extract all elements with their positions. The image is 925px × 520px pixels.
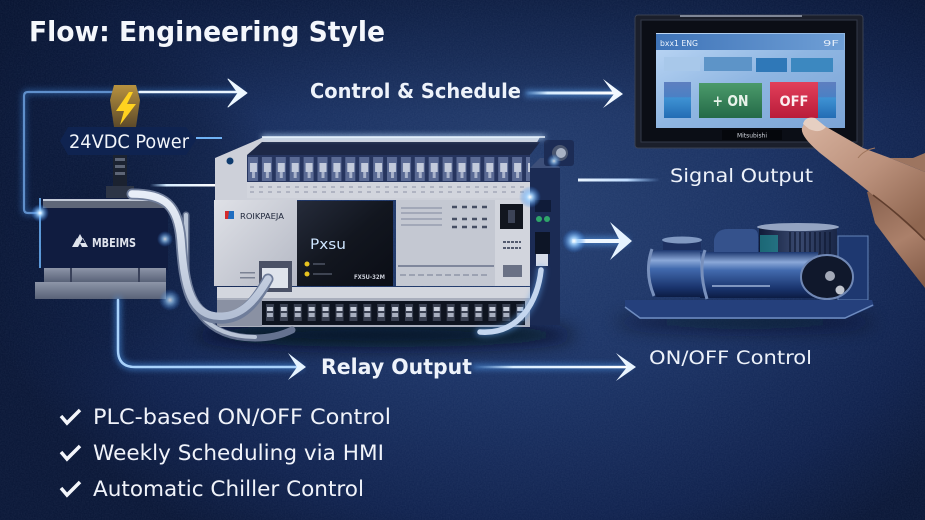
- text: control and schedule: Control & Schedule: [310, 79, 521, 103]
- chiller tube: [648, 249, 818, 299]
- text: on/off control: ON/OFF Control: [649, 347, 812, 369]
- chiller back box: [838, 236, 868, 300]
- cables from power supply to PLC: [132, 194, 292, 338]
- PLC display panel: [297, 201, 393, 286]
- HMI tile right: [818, 82, 836, 118]
- signal output line: [578, 178, 660, 182]
- PLC communication connector: [259, 261, 292, 292]
- PLC display panel: FX5U-32M: [354, 274, 385, 281]
- hand touching HMI: [802, 118, 925, 288]
- icon: power bolt: [110, 85, 140, 127]
- check item 2: Weekly Scheduling via HMI: [93, 441, 384, 465]
- arrow: relay output to on/off control: [472, 353, 636, 381]
- HMI brand plate: [722, 130, 782, 140]
- chiller base plate: [625, 300, 874, 319]
- PLC edge highlights: [31, 137, 561, 311]
- PLC side module: [530, 140, 574, 325]
- right cable from PLC: [480, 270, 541, 332]
- text: relay output: Relay Output: [321, 355, 472, 379]
- power supply logo: MBEIMS: [92, 236, 136, 250]
- checklist: [61, 405, 391, 501]
- PLC brand panel: ROIKPAEJA: [240, 212, 285, 221]
- PLC brand panel: [214, 200, 297, 286]
- arrow: PLC to chiller: [562, 222, 632, 260]
- arrow: power loop to control and schedule: [24, 79, 247, 213]
- PLC top housing: [215, 137, 540, 200]
- arrow: power supply to relay output: [118, 300, 306, 380]
- chiller unit: [625, 223, 874, 319]
- PLC controller: [214, 137, 574, 327]
- arrow: schedule to HMI: [525, 79, 623, 108]
- PLC display panel: Pxsu: [310, 237, 346, 253]
- HMI OFF button: [770, 82, 818, 118]
- title: Flow: Engineering Style: [29, 15, 385, 48]
- label: 24VDC power: 24VDC Power: [69, 132, 189, 153]
- chiller top port: [662, 236, 702, 252]
- label: 24VDC power: [60, 127, 196, 155]
- check item 3: Automatic Chiller Control: [93, 477, 364, 501]
- chiller small dome: [714, 229, 758, 252]
- PLC specification panel: [396, 200, 495, 286]
- HMI screen: bxx1 ENG: [660, 39, 698, 48]
- power supply unit: [35, 198, 168, 299]
- power supply column: [106, 153, 134, 198]
- HMI screen: [656, 33, 845, 128]
- text: signal output: Signal Output: [670, 165, 813, 187]
- HMI OFF button: OFF: [780, 94, 808, 110]
- check item 1: PLC-based ON/OFF Control: [93, 405, 391, 429]
- chiller end cap: [801, 255, 853, 299]
- HMI brand plate: Mitsubishi: [737, 132, 767, 140]
- chiller fan unit: [757, 223, 839, 256]
- PLC lower terminal block: [217, 287, 530, 327]
- HMI screen: 9F: [823, 39, 840, 48]
- HMI touch panel: [635, 15, 863, 148]
- HMI tile left: [664, 82, 691, 118]
- HMI ON button: [699, 83, 762, 118]
- HMI ON button: + ON: [712, 92, 748, 110]
- PLC right panel: [495, 200, 530, 286]
- connector lines to PLC: [150, 137, 222, 186]
